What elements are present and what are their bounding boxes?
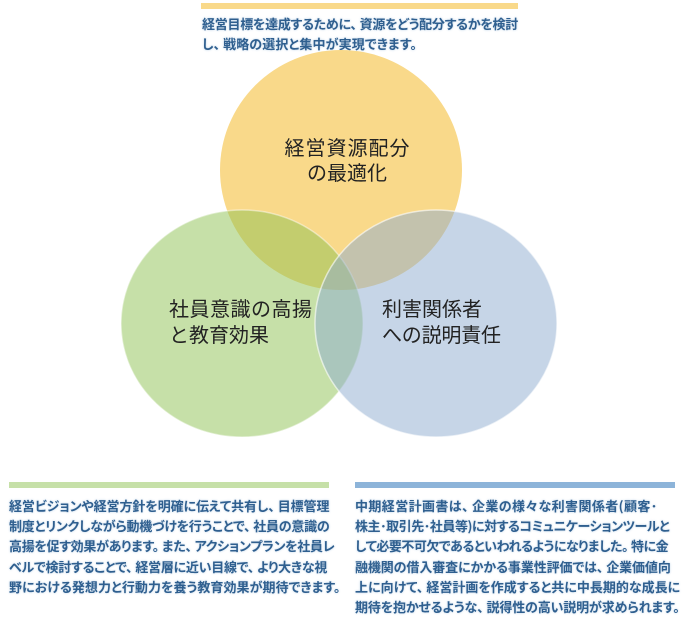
text: stakeholder description: 上に向けて、経営計画を作成すると共に中長期的な成長に — [355, 577, 680, 596]
text: stakeholder description: 融機関の借入審査にかかる事業性評価では、企業価値向 — [355, 557, 671, 576]
circle: stakeholders — [315, 210, 557, 437]
label: employee awareness — [169, 298, 312, 347]
text: stakeholder description: して必要不可欠であるといわれるようになりました。特に金 — [355, 536, 668, 555]
bar: bottom left green — [9, 482, 329, 488]
text: employee awareness description — [8, 496, 340, 596]
text: stakeholder description: 期待を抱かせるような、説得性の高い説明が求められます。 — [355, 597, 680, 616]
text: stakeholder description: 株主･取引先･社員等)に対するコミュニケーションツールと — [355, 516, 669, 535]
text: stakeholder description: 中期経営計画書は、企業の様々な利害関係者(顧客･ — [355, 496, 658, 515]
label: employee awareness: 社員意識の高揚 — [169, 298, 312, 321]
circle: employee awareness — [121, 210, 363, 437]
text: employee awareness description: ベルで検討することで、経営層に近い目線で、より大きな視 — [9, 557, 327, 576]
text: employee awareness description: 経営ビジョンや経営方針を明確に伝えて共有し、目標管理 — [9, 496, 329, 515]
bar: bottom right blue — [355, 482, 675, 488]
text: employee awareness description: 高揚を促す効果があります。また、アクションプランを社員レ — [9, 536, 334, 555]
label: resource allocation — [284, 137, 410, 185]
label: stakeholders — [382, 298, 501, 347]
text: stakeholder description — [354, 496, 680, 616]
text: resource allocation description: し、戦略の選択と集中が実現できます。 — [202, 34, 417, 53]
label: resource allocation: の最適化 — [307, 162, 387, 185]
bar: top yellow — [201, 3, 518, 9]
text: resource allocation description: 経営目標を達成するために、資源をどう配分するかを検討 — [202, 14, 518, 33]
text: resource allocation description — [202, 14, 518, 53]
label: employee awareness: と教育効果 — [169, 324, 269, 347]
label: resource allocation: 経営資源配分 — [284, 137, 410, 160]
circle: resource allocation — [220, 50, 462, 290]
text: employee awareness description: 野における発想力と行動力を養う教育効果が期待できます。 — [9, 577, 340, 596]
label: stakeholders: 利害関係者 — [382, 298, 482, 321]
text: employee awareness description: 制度とリンクしながら動機づけを行うことで、社員の意識の — [9, 516, 329, 535]
label: stakeholders: への説明責任 — [382, 324, 501, 347]
